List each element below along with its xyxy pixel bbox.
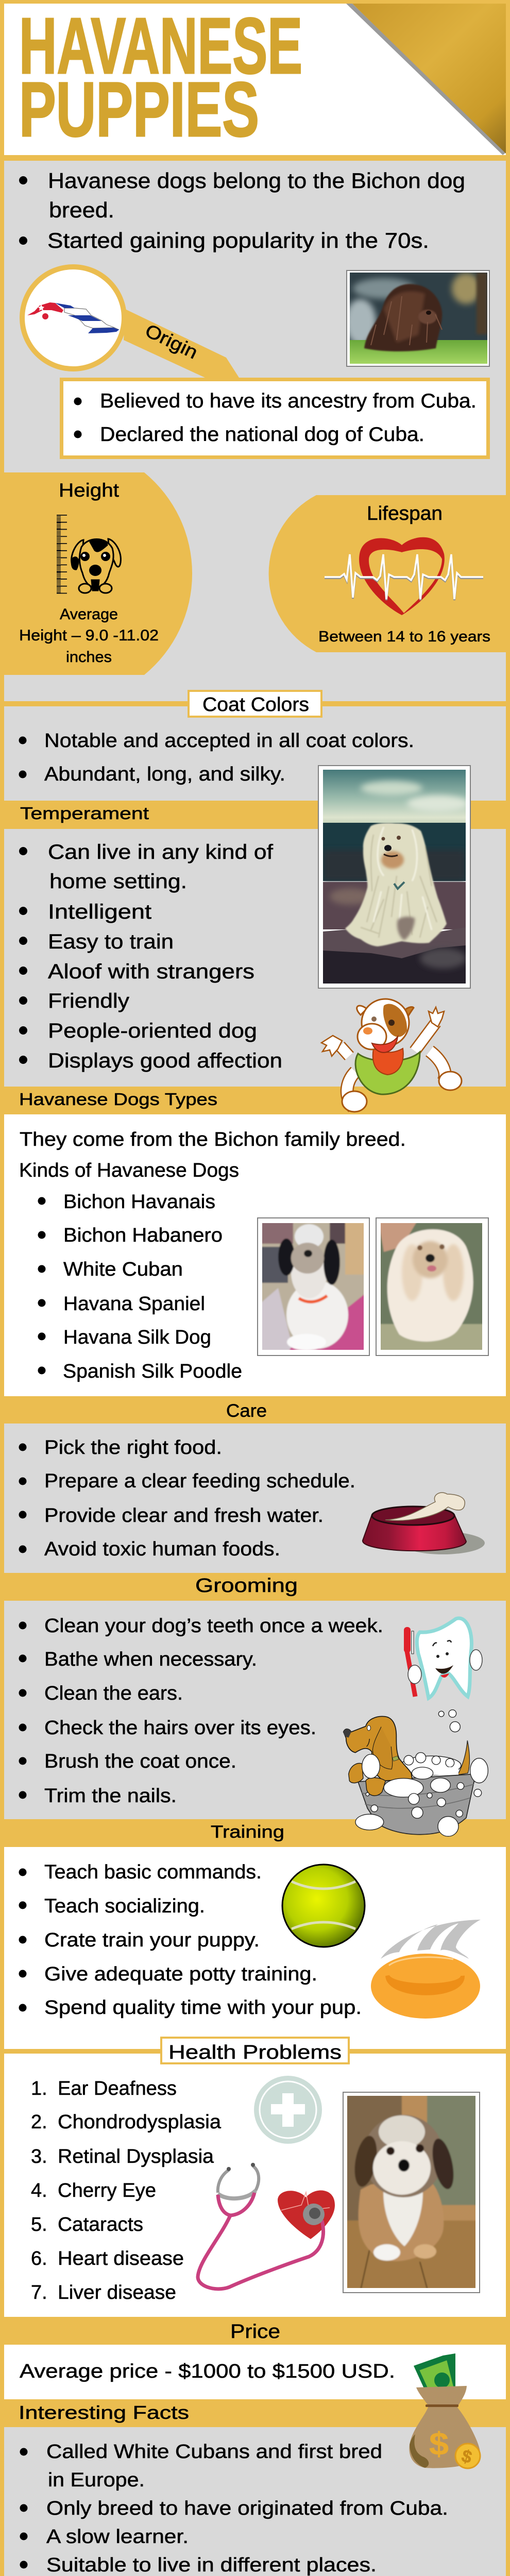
health problems numbered list: 2.: [31, 2111, 47, 2133]
coat colors list: Abundant, long, and silky.: [44, 764, 285, 785]
temperament list: Intelligent: [48, 901, 151, 923]
icon: Cuba flag map: [27, 302, 119, 333]
heading: types: Havanese Dogs Types: [19, 1090, 217, 1109]
heading: health problems: [161, 2038, 349, 2063]
icon: money bag: $: [429, 2427, 449, 2462]
icon: dog in bath tub: [344, 1710, 488, 1836]
panel: coat colors: [4, 691, 506, 801]
origin info box: [62, 379, 488, 457]
heading: price: Price: [230, 2321, 280, 2343]
types list: Spanish Silk Poodle: [63, 1361, 242, 1382]
icon: tennis ball: [282, 1865, 365, 1947]
grooming list: Check the hairs over its eyes.: [44, 1717, 316, 1739]
coat colors list: Notable and accepted in all coat colors.: [44, 730, 414, 752]
training list: Crate train your puppy.: [44, 1929, 260, 1951]
care list: Avoid toxic human foods.: [44, 1538, 280, 1560]
types list: Havana Spaniel: [63, 1293, 205, 1315]
health problems numbered list: 7.: [31, 2282, 47, 2303]
icon: frisbee with motion swoosh: [371, 1920, 481, 2019]
icon: ruler: [59, 515, 62, 594]
heading: coat colors: [189, 691, 321, 717]
health problems numbered list: Liver disease: [58, 2282, 176, 2303]
training list: [19, 1861, 362, 2019]
temperament list: Aloof with strangers: [48, 960, 254, 983]
temperament list: [19, 841, 282, 1072]
heading: temperament: Temperament: [20, 804, 149, 823]
icon: heart with pulse line: [325, 537, 483, 615]
title: [19, 2, 302, 152]
origin label: Origin: [142, 319, 201, 363]
coat colors list: [19, 730, 414, 785]
panel: havanese dogs types: [4, 999, 506, 1396]
temperament list: home setting.: [49, 870, 187, 893]
facts list: Called White Cubans and first bred: [46, 2441, 382, 2463]
icon: money bag: $: [460, 2446, 474, 2467]
facts list: A slow learner.: [46, 2526, 189, 2548]
panel: price: [4, 2317, 506, 2399]
grooming list: Trim the nails.: [44, 1785, 177, 1807]
heading: health problems: Health Problems: [168, 2042, 342, 2063]
photo: tri-colour havanese: [343, 2092, 480, 2293]
panel: height: Height: [59, 480, 120, 501]
health problems numbered list: Heart disease: [58, 2248, 184, 2269]
origin info box: Declared the national dog of Cuba.: [100, 423, 424, 446]
health problems numbered list: 5.: [31, 2214, 47, 2235]
facts list: Only breed to have originated from Cuba.: [46, 2498, 448, 2519]
heading: interesting facts: Interesting Facts: [19, 2402, 189, 2423]
facts list: Suitable to live in different places.: [46, 2554, 377, 2576]
types list: [38, 1191, 242, 1382]
grooming list: Clean your dog’s teeth once a week.: [44, 1615, 383, 1637]
training list: Give adequate potty training.: [44, 1963, 317, 1985]
panel: lifespan: Lifespan: [367, 503, 443, 524]
training list: Spend quality time with your pup.: [44, 1997, 362, 2019]
health problems numbered list: 1.: [31, 2078, 47, 2099]
grooming list: [19, 1615, 383, 1807]
health problems numbered list: Ear Deafness: [58, 2078, 177, 2099]
panel: health problems: [4, 2038, 506, 2317]
title: HAVANESE: [19, 2, 302, 90]
panel: temperament: [4, 766, 506, 1087]
grooming list: Brush the coat once.: [44, 1751, 236, 1772]
types list: Havana Silk Dog: [63, 1327, 211, 1348]
photo: cream dog: [376, 1218, 488, 1355]
header panel: [4, 2, 506, 155]
grooming list: Bathe when necessary.: [44, 1649, 257, 1670]
intro text: They come from the Bichon family breed.: [20, 1129, 406, 1150]
price text: Average price - $1000 to $1500 USD.: [20, 2361, 395, 2382]
photo: brown dog on grass: [345, 270, 489, 366]
health problems numbered list: Chondrodysplasia: [58, 2111, 222, 2133]
care list: [19, 1437, 355, 1560]
photo: black and white dog: [258, 1218, 369, 1355]
types list: Bichon Habanero: [63, 1225, 223, 1246]
care list: Provide clear and fresh water.: [44, 1505, 324, 1527]
origin ribbon: [124, 309, 239, 378]
health problems numbered list: Cataracts: [58, 2214, 143, 2235]
icon: money bag: [409, 2353, 480, 2468]
facts list: in Europe.: [48, 2469, 145, 2491]
panel: intro and origin: [0, 161, 506, 701]
training list: Teach socializing.: [44, 1895, 205, 1917]
intro text: Kinds of Havanese Dogs: [19, 1160, 239, 1181]
panel: training: [4, 1710, 506, 2049]
facts list: [20, 2441, 448, 2576]
heading: care: Care: [226, 1401, 267, 1421]
types list: Bichon Havanais: [63, 1191, 215, 1213]
icon: cartoon dog: [321, 999, 462, 1112]
temperament list: People-oriented dog: [48, 1020, 257, 1042]
panel: care: [4, 1396, 506, 1573]
icon: stethoscope and heart: [198, 2163, 335, 2289]
panel: lifespan: Between 14 to 16 years: [318, 629, 490, 645]
care list: Prepare a clear feeding schedule.: [44, 1470, 355, 1492]
temperament list: Can live in any kind of: [48, 841, 274, 863]
panel: height: Average: [60, 606, 118, 623]
heading: coat colors: Coat Colors: [202, 694, 309, 716]
health problems numbered list: [31, 2078, 222, 2303]
photo: white dog on rock: [318, 766, 470, 988]
intro text: [19, 1129, 406, 1181]
temperament list: Friendly: [48, 990, 129, 1012]
temperament list: Displays good affection: [48, 1049, 282, 1072]
health problems numbered list: 3.: [31, 2146, 47, 2167]
temperament list: Easy to train: [48, 930, 174, 953]
panel: height: [0, 472, 192, 675]
icon: food bowl with bone: [363, 1493, 485, 1554]
intro bullet list: [19, 168, 465, 252]
origin circle with Cuba map: [20, 264, 127, 371]
care list: Pick the right food.: [44, 1437, 222, 1459]
intro bullet list: Havanese dogs belong to the Bichon dog: [48, 168, 465, 193]
panel: grooming: [4, 1573, 506, 1819]
panel: height: inches: [66, 649, 112, 666]
intro bullet list: Started gaining popularity in the 70s.: [47, 228, 429, 252]
health problems numbered list: Cherry Eye: [58, 2180, 156, 2201]
origin info box: Believed to have its ancestry from Cuba.: [100, 390, 477, 412]
panel: height: Height – 9.0 -11.02: [19, 627, 159, 644]
panel: lifespan: [269, 495, 506, 652]
health problems numbered list: 6.: [31, 2248, 47, 2269]
panel: interesting facts: [4, 2353, 506, 2576]
health problems numbered list: Retinal Dysplasia: [58, 2146, 214, 2167]
icon: smiling tooth with brush: [404, 1618, 482, 1698]
title: PUPPIES: [19, 66, 259, 152]
icon: medical plus badge: [254, 2076, 322, 2144]
grooming list: Clean the ears.: [44, 1683, 183, 1704]
heading: training: Training: [211, 1822, 284, 1842]
icon: spotted puppy: [72, 539, 121, 593]
heading: grooming: Grooming: [195, 1575, 298, 1597]
intro bullet list: breed.: [49, 198, 114, 222]
types list: White Cuban: [63, 1259, 183, 1280]
health problems numbered list: 4.: [31, 2180, 47, 2201]
corner ribbon: [346, 4, 506, 155]
training list: Teach basic commands.: [44, 1861, 262, 1883]
